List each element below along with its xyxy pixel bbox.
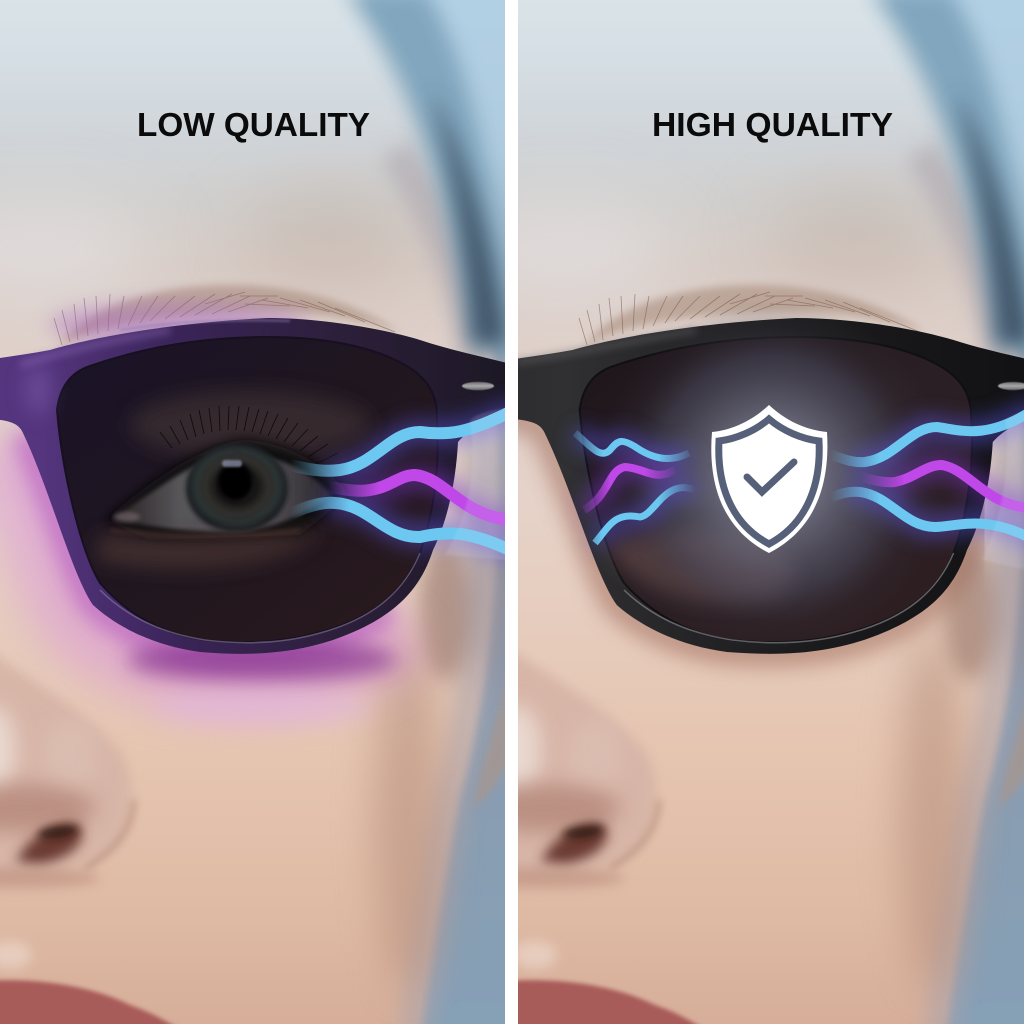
face photo right <box>518 0 1024 1024</box>
light waves right <box>290 412 510 550</box>
lens glow <box>628 308 914 620</box>
light waves right of shield <box>832 412 1024 538</box>
rivet <box>998 382 1024 390</box>
wave cyan lower blocked <box>595 488 695 543</box>
wave magenta <box>330 475 510 520</box>
wave magenta blocked <box>584 467 675 510</box>
glasses frame black <box>480 318 1024 654</box>
heading: low quality: LOW QUALITY <box>137 106 370 143</box>
wave cyan upper blocked <box>575 433 689 459</box>
wave cyan upper <box>290 412 510 471</box>
panel: high quality <box>518 0 1024 1024</box>
purple light leak around frame <box>23 303 518 726</box>
heading: high quality: HIGH QUALITY <box>652 106 893 143</box>
frame rim highlight <box>624 553 954 643</box>
face photo left <box>0 0 505 1024</box>
glasses frame purple <box>0 318 507 654</box>
lens right <box>580 337 972 642</box>
wave cyan upper <box>832 412 1024 462</box>
soft shadow under frame <box>518 420 1024 677</box>
wave cyan lower <box>832 492 1024 538</box>
wave magenta <box>862 465 1024 508</box>
frame highlight <box>100 553 420 643</box>
wave cyan lower <box>295 503 510 550</box>
eye behind lens <box>95 391 370 568</box>
lens left <box>57 337 438 642</box>
rivet <box>462 382 494 390</box>
light waves left of shield <box>575 433 695 543</box>
lens side reflection <box>982 412 1024 570</box>
panel: low quality <box>0 0 505 1024</box>
icon: shield with check mark <box>711 405 827 553</box>
lens side reflection <box>445 408 507 560</box>
lower lid visible through lens <box>605 530 794 603</box>
